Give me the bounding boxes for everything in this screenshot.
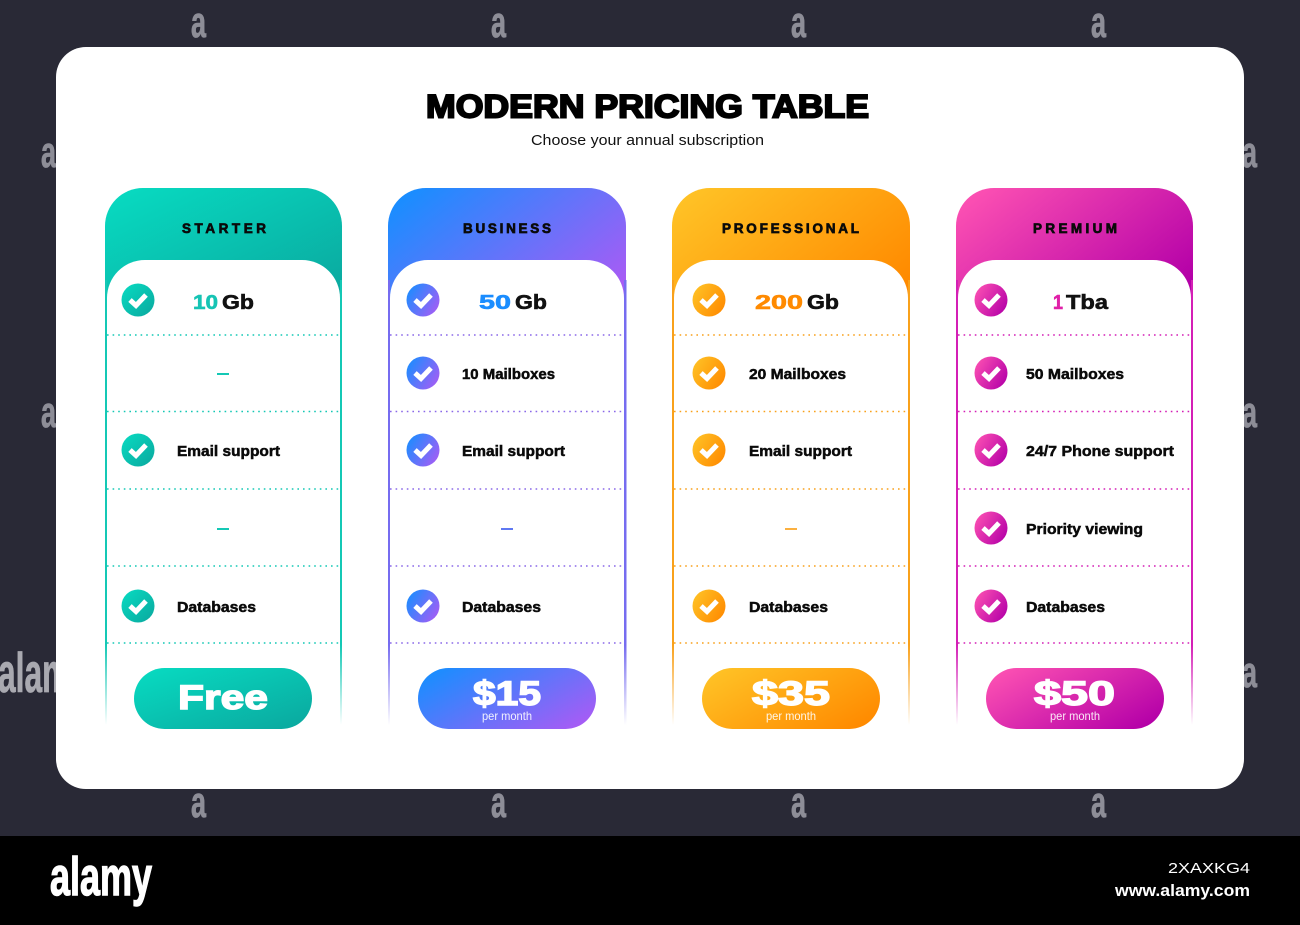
price button: free	[134, 668, 312, 729]
professional side borders	[672, 280, 910, 725]
price button: $50: per month	[1050, 709, 1100, 723]
premium plan name: PREMIUM	[1033, 221, 1117, 236]
title: MODERN PRICING TABLE	[426, 88, 869, 124]
watermark marks: a	[791, 778, 806, 827]
watermark marks: a	[491, 778, 506, 827]
storage: 10 Gb: 10	[193, 292, 218, 314]
watermark marks: a	[41, 388, 56, 437]
50 mailboxes: 50 Mailboxes	[1026, 367, 1124, 383]
price button: free: Free	[178, 679, 268, 717]
watermark marks: a	[1091, 778, 1106, 827]
10 mailboxes	[406, 356, 555, 390]
starter row dividers	[107, 335, 340, 643]
email support: Email support	[177, 444, 280, 460]
business header	[388, 188, 626, 300]
price button: $15	[418, 668, 596, 729]
email support	[406, 434, 565, 466]
panel: business plan	[388, 188, 626, 730]
panel: starter plan	[105, 188, 342, 730]
price button: $15: per month	[482, 709, 532, 723]
priority viewing: not included	[501, 528, 513, 530]
price button: $35	[702, 668, 880, 729]
priority viewing: not included	[785, 528, 797, 530]
price button: $50	[986, 668, 1164, 729]
image id: 2XAXKG4	[1168, 860, 1250, 877]
professional header	[672, 188, 910, 300]
storage: 1 Tba	[974, 284, 1109, 316]
storage: 50 Gb: Gb	[515, 292, 547, 314]
black footer bar	[0, 836, 1300, 925]
email support: Email support	[749, 444, 852, 460]
email support: Email support	[462, 444, 565, 460]
50 mailboxes	[974, 356, 1124, 390]
premium row dividers	[958, 335, 1191, 643]
watermark marks: a	[1242, 388, 1257, 437]
price button: $35: $35	[752, 675, 830, 713]
databases: Databases	[1026, 600, 1105, 616]
subtitle: Choose your annual subscription	[531, 133, 764, 149]
watermark marks: alamy	[0, 641, 88, 704]
storage: 50 Gb	[406, 284, 547, 316]
24/7 phone support: 24/7 Phone support	[1026, 444, 1174, 460]
premium side borders	[956, 280, 1193, 725]
priority viewing	[974, 512, 1143, 544]
databases: Databases	[177, 600, 256, 616]
email support	[122, 434, 280, 466]
website: www.alamy.com	[1114, 881, 1250, 900]
price button: $35: per month	[766, 709, 816, 723]
premium body	[958, 260, 1191, 730]
watermark marks: a	[41, 128, 56, 177]
storage: 200 Gb: Gb	[807, 292, 839, 314]
price button: $50: $50	[1034, 675, 1115, 713]
storage: 200 Gb	[692, 284, 839, 316]
email support	[692, 434, 852, 466]
storage: 50 Gb: 50	[479, 292, 511, 314]
panel: premium plan	[956, 188, 1193, 730]
storage: 1 Tba: Tba	[1066, 292, 1109, 314]
watermark marks: a	[191, 778, 206, 827]
alamy logo: alamy	[50, 847, 152, 907]
starter side borders	[105, 280, 342, 725]
starter body	[107, 260, 340, 730]
storage: 1 Tba: 1	[1053, 292, 1063, 314]
business side borders	[388, 280, 626, 725]
databases: Databases	[462, 600, 541, 616]
20 mailboxes	[692, 356, 846, 390]
professional plan name: PROFESSIONAL	[722, 221, 859, 236]
premium header	[956, 188, 1193, 300]
databases: Databases	[749, 600, 828, 616]
business body	[390, 260, 624, 730]
20 mailboxes: 20 Mailboxes	[749, 367, 846, 383]
mailboxes: not included	[217, 373, 229, 375]
databases	[692, 590, 828, 622]
databases	[122, 590, 256, 622]
price button: $15: $15	[473, 675, 541, 713]
databases	[974, 590, 1105, 622]
professional body	[674, 260, 908, 730]
panel: professional plan	[672, 188, 910, 730]
priority viewing: Priority viewing	[1026, 522, 1143, 538]
24/7 phone support	[974, 434, 1174, 466]
business row dividers	[390, 335, 624, 643]
databases	[406, 590, 541, 622]
business plan name: BUSINESS	[463, 221, 551, 236]
starter plan name: STARTER	[182, 221, 266, 236]
starter header	[105, 188, 342, 300]
professional row dividers	[674, 335, 908, 643]
10 mailboxes: 10 Mailboxes	[462, 367, 555, 383]
watermark marks: a	[1242, 648, 1257, 697]
storage: 10 Gb: Gb	[222, 292, 254, 314]
storage: 10 Gb	[122, 284, 254, 316]
storage: 200 Gb: 200	[755, 292, 803, 314]
priority viewing: not included	[217, 528, 229, 530]
white card	[56, 47, 1244, 789]
watermark marks: a	[1242, 128, 1257, 177]
